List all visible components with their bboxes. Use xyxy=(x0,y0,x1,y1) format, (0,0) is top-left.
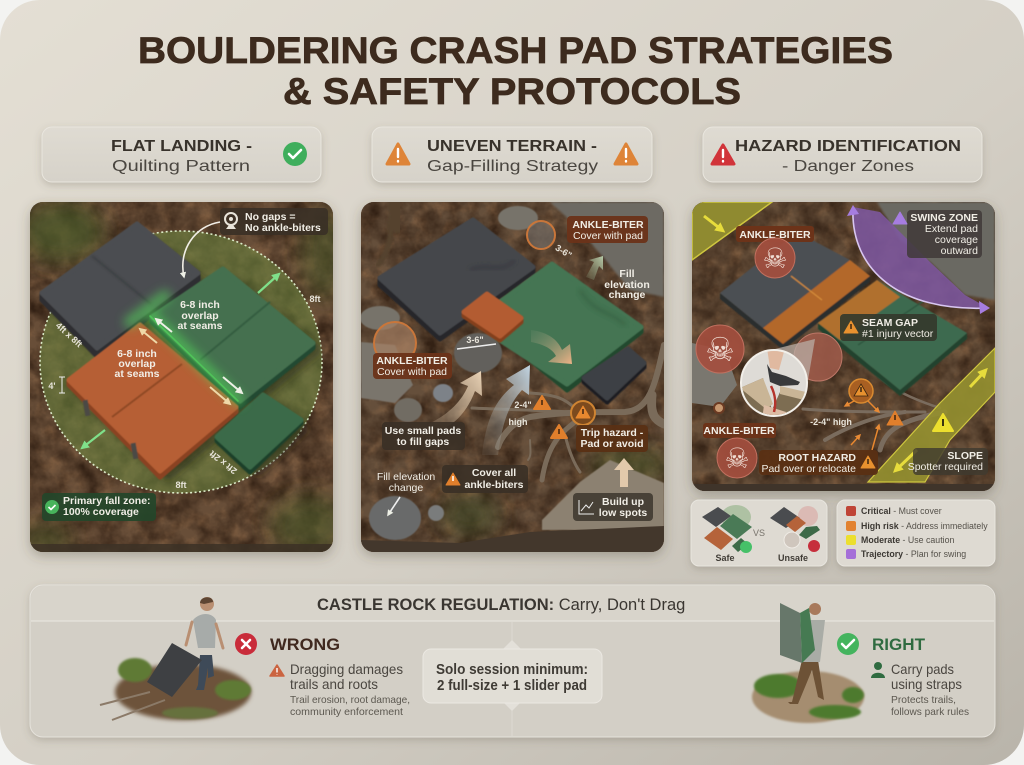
right text: follows park rules xyxy=(891,706,969,718)
arrow: build up xyxy=(614,458,634,487)
callout: ankle-biter left xyxy=(373,353,452,379)
dimension labels xyxy=(48,294,321,490)
callout: build up low spots xyxy=(573,493,653,521)
right text xyxy=(871,661,969,718)
arrow: to rock xyxy=(388,497,400,515)
unsafe mini layout xyxy=(770,506,820,552)
callout: swing zone: SWING ZONE xyxy=(910,212,978,224)
callout: root hazard: ROOT HAZARD xyxy=(778,452,856,464)
overlap label upper: overlap xyxy=(181,310,219,322)
ground ledge xyxy=(692,484,995,491)
slope zone xyxy=(868,348,995,482)
callout: swing zone: outward xyxy=(941,245,978,257)
label: ankle-biter lower: ANKLE-BITER xyxy=(703,425,775,437)
ankle-biter ring upper xyxy=(527,221,574,260)
callout: ankle-biter top xyxy=(567,216,648,243)
callout: ankle-biter top: Cover with pad xyxy=(573,230,643,242)
callout: seam gap xyxy=(840,314,937,341)
callout: no gaps: No gaps = xyxy=(245,211,295,223)
overlap label lower: at seams xyxy=(115,368,160,380)
rock size label: 3-6" xyxy=(466,335,484,345)
callout: seam gap: #1 injury vector xyxy=(862,328,934,340)
slope warning and arrows xyxy=(896,371,985,470)
root height label: 2-4" xyxy=(514,400,532,410)
overlap label lower: overlap xyxy=(118,358,156,370)
arrow: fill elevation upper xyxy=(586,256,603,280)
safe mini layout xyxy=(702,505,752,553)
overlap label lower: 6-8 inch xyxy=(117,348,157,360)
wrong text: Dragging damages xyxy=(290,661,403,677)
fall zone arrows xyxy=(82,274,279,448)
panel heading: hazard identification: HAZARD IDENTIFICATION xyxy=(735,138,961,155)
right heading: RIGHT xyxy=(872,635,926,654)
callout: primary fall zone: 100% coverage xyxy=(63,506,139,518)
callout: slope: SLOPE xyxy=(947,450,983,462)
skull marker left xyxy=(696,325,744,373)
rocks xyxy=(360,206,664,540)
callout: ankle-biter top: ANKLE-BITER xyxy=(572,219,644,231)
skull marker left: ☠ xyxy=(705,330,735,369)
callout: no gaps xyxy=(183,208,328,277)
root height label: high xyxy=(508,417,528,427)
panel: Castle Rock regulation xyxy=(30,585,995,737)
callout: solo session minimum xyxy=(423,640,602,711)
callout: trip hazard xyxy=(576,425,648,452)
panel heading: hazard identification: - Danger Zones xyxy=(782,158,914,175)
tree roots xyxy=(472,345,664,480)
illustration: carrying the pad xyxy=(752,603,864,723)
callout: root hazard xyxy=(759,450,878,475)
large boulder xyxy=(550,202,664,297)
small green slider pad xyxy=(217,395,301,472)
warning icons on roots xyxy=(534,396,595,438)
callout: slope: Spotter required xyxy=(908,461,983,473)
dimension labels: 8ft xyxy=(310,294,321,304)
right text: Protects trails, xyxy=(891,694,956,706)
root height label: -2-4" high xyxy=(810,417,852,427)
wrong text: Trail erosion, root damage, xyxy=(290,694,410,706)
ankle injury inset xyxy=(740,339,815,420)
text: fill elevation change top: elevation xyxy=(604,279,650,291)
orange slider pad xyxy=(464,294,521,340)
overlap label upper: at seams xyxy=(178,320,223,332)
wrong text xyxy=(270,661,410,718)
panel heading: flat landing: Quilting Pattern xyxy=(112,158,250,175)
panel heading: flat landing: FLAT LANDING - xyxy=(111,138,252,155)
wrong heading: WRONG xyxy=(270,635,340,654)
seam glow xyxy=(130,296,238,401)
tiny ankle-biter rock xyxy=(714,403,724,413)
right text: using straps xyxy=(891,676,962,692)
callout: swing zone: coverage xyxy=(935,234,978,246)
text: fill elevation change top: change xyxy=(609,289,646,301)
pad shadows xyxy=(52,235,325,482)
overlap label upper: 6-8 inch xyxy=(180,299,220,311)
yellow zone top-left xyxy=(692,202,772,260)
right badge xyxy=(837,633,859,655)
callout: trip hazard: Trip hazard - xyxy=(581,427,644,439)
callout: cover all ankle-biters xyxy=(442,465,528,493)
callout: ankle-biter left: Cover with pad xyxy=(377,366,447,378)
text: fill elevation change bottom: change xyxy=(389,482,423,494)
callout: cover all ankle-biters: Cover all xyxy=(472,467,516,479)
callout: cover all ankle-biters: ankle-biters xyxy=(465,479,524,491)
dimension labels: 4ft x 8ft xyxy=(54,320,84,349)
callout: solo session minimum: 2 full-size + 1 slider pad xyxy=(437,678,587,694)
text: fill elevation change top: Fill xyxy=(619,268,635,280)
panel heading: uneven terrain: UNEVEN TERRAIN - xyxy=(427,138,597,155)
swing zone xyxy=(847,205,990,314)
arrow: small pads xyxy=(428,371,482,430)
small dark pad xyxy=(584,349,644,402)
green crash pad xyxy=(152,269,313,407)
arrow on green pad xyxy=(531,330,572,364)
callout: small pads: Use small pads xyxy=(385,425,461,437)
title xyxy=(138,30,893,112)
seam overlap arrows xyxy=(140,319,242,404)
panel: hazard identification diagram xyxy=(692,202,995,491)
callout: solo session minimum: Solo session minimum: xyxy=(436,662,588,678)
title: BOULDERING CRASH PAD STRATEGIES xyxy=(138,30,893,71)
legend: risk levels: Trajectory - Plan for swing xyxy=(861,549,966,559)
ground ledge xyxy=(361,526,664,552)
roots xyxy=(802,380,937,452)
wrong badge xyxy=(235,633,257,655)
rock size label xyxy=(457,335,496,349)
panel: uneven terrain diagram xyxy=(360,202,670,552)
right text: Carry pads xyxy=(891,661,954,677)
callout: no gaps: No ankle-biters xyxy=(245,222,321,234)
legend: risk levels: Critical - Must cover xyxy=(861,506,942,516)
wrong text: trails and roots xyxy=(290,676,378,692)
callout: swing zone xyxy=(893,210,982,258)
callout: trip hazard: Pad or avoid xyxy=(580,438,644,450)
root height label xyxy=(508,400,532,427)
callout: small pads: to fill gaps xyxy=(397,436,449,448)
panel heading: uneven terrain xyxy=(372,127,652,182)
primary fall zone circle xyxy=(40,231,322,493)
callout: slope xyxy=(908,448,988,475)
regulation heading: CASTLE ROCK REGULATION: Carry, Don't Drag xyxy=(317,596,685,614)
panel: flat landing diagram xyxy=(17,202,350,558)
legend: risk levels xyxy=(837,500,995,566)
callout: seam gap: SEAM GAP xyxy=(862,317,918,329)
illustration: dragging the pad xyxy=(100,597,251,720)
callout: build up low spots: low spots xyxy=(599,507,647,519)
dimension labels: 4' xyxy=(48,381,56,391)
hazard green and orange pad xyxy=(818,280,967,396)
safe label: Safe xyxy=(715,553,735,563)
green crash pad xyxy=(497,264,641,390)
callout: swing zone: Extend pad xyxy=(925,223,978,235)
wrong text: community enforcement xyxy=(290,706,403,718)
dimension labels: 2ft x 2ft xyxy=(207,449,239,476)
panel: safe vs unsafe comparison xyxy=(691,500,827,566)
callout: small pads xyxy=(382,422,465,450)
text: fill elevation change bottom: Fill elevation xyxy=(377,471,435,483)
callout: primary fall zone: Primary fall zone: xyxy=(63,495,151,507)
grey crash pad xyxy=(380,220,533,339)
unsafe label: Unsafe xyxy=(778,553,808,563)
hazard grey and orange pad xyxy=(720,232,870,350)
callout: primary fall zone xyxy=(42,493,156,521)
arrow: ankle biters xyxy=(482,365,530,455)
callout: build up low spots: Build up xyxy=(602,496,644,508)
title: & SAFETY PROTOCOLS xyxy=(283,71,741,112)
label: ankle-biter top xyxy=(736,226,814,242)
top right boulder xyxy=(877,202,995,300)
label: ankle-biter top: ANKLE-BITER xyxy=(739,229,811,241)
left boulder xyxy=(692,343,737,407)
skull marker lower: ☠ xyxy=(724,442,750,475)
panel heading: hazard identification xyxy=(703,127,982,182)
hazard circle centre xyxy=(794,333,842,381)
root hazard warnings xyxy=(845,379,903,450)
ankle-biter ring lower xyxy=(374,322,416,364)
panel heading: uneven terrain: Gap-Filling Strategy xyxy=(427,158,598,175)
legend: risk levels: High risk - Address immediately xyxy=(861,521,988,531)
skull marker lower xyxy=(717,438,757,478)
vs label: VS xyxy=(753,528,765,538)
callout: ankle-biter left: ANKLE-BITER xyxy=(376,355,448,367)
yellow arrow top-left xyxy=(704,216,722,230)
panel heading: flat landing xyxy=(42,127,321,182)
skull marker top xyxy=(755,238,795,278)
ankle-biter ring upper: 3-6" xyxy=(554,243,574,260)
legend: risk levels: Moderate - Use caution xyxy=(861,535,954,545)
dimension labels: 8ft xyxy=(176,480,187,490)
callout: root hazard: Pad over or relocate xyxy=(761,463,856,475)
grey crash pad xyxy=(42,224,198,356)
skull marker top: ☠ xyxy=(762,242,788,275)
orange crash pad xyxy=(69,325,236,477)
